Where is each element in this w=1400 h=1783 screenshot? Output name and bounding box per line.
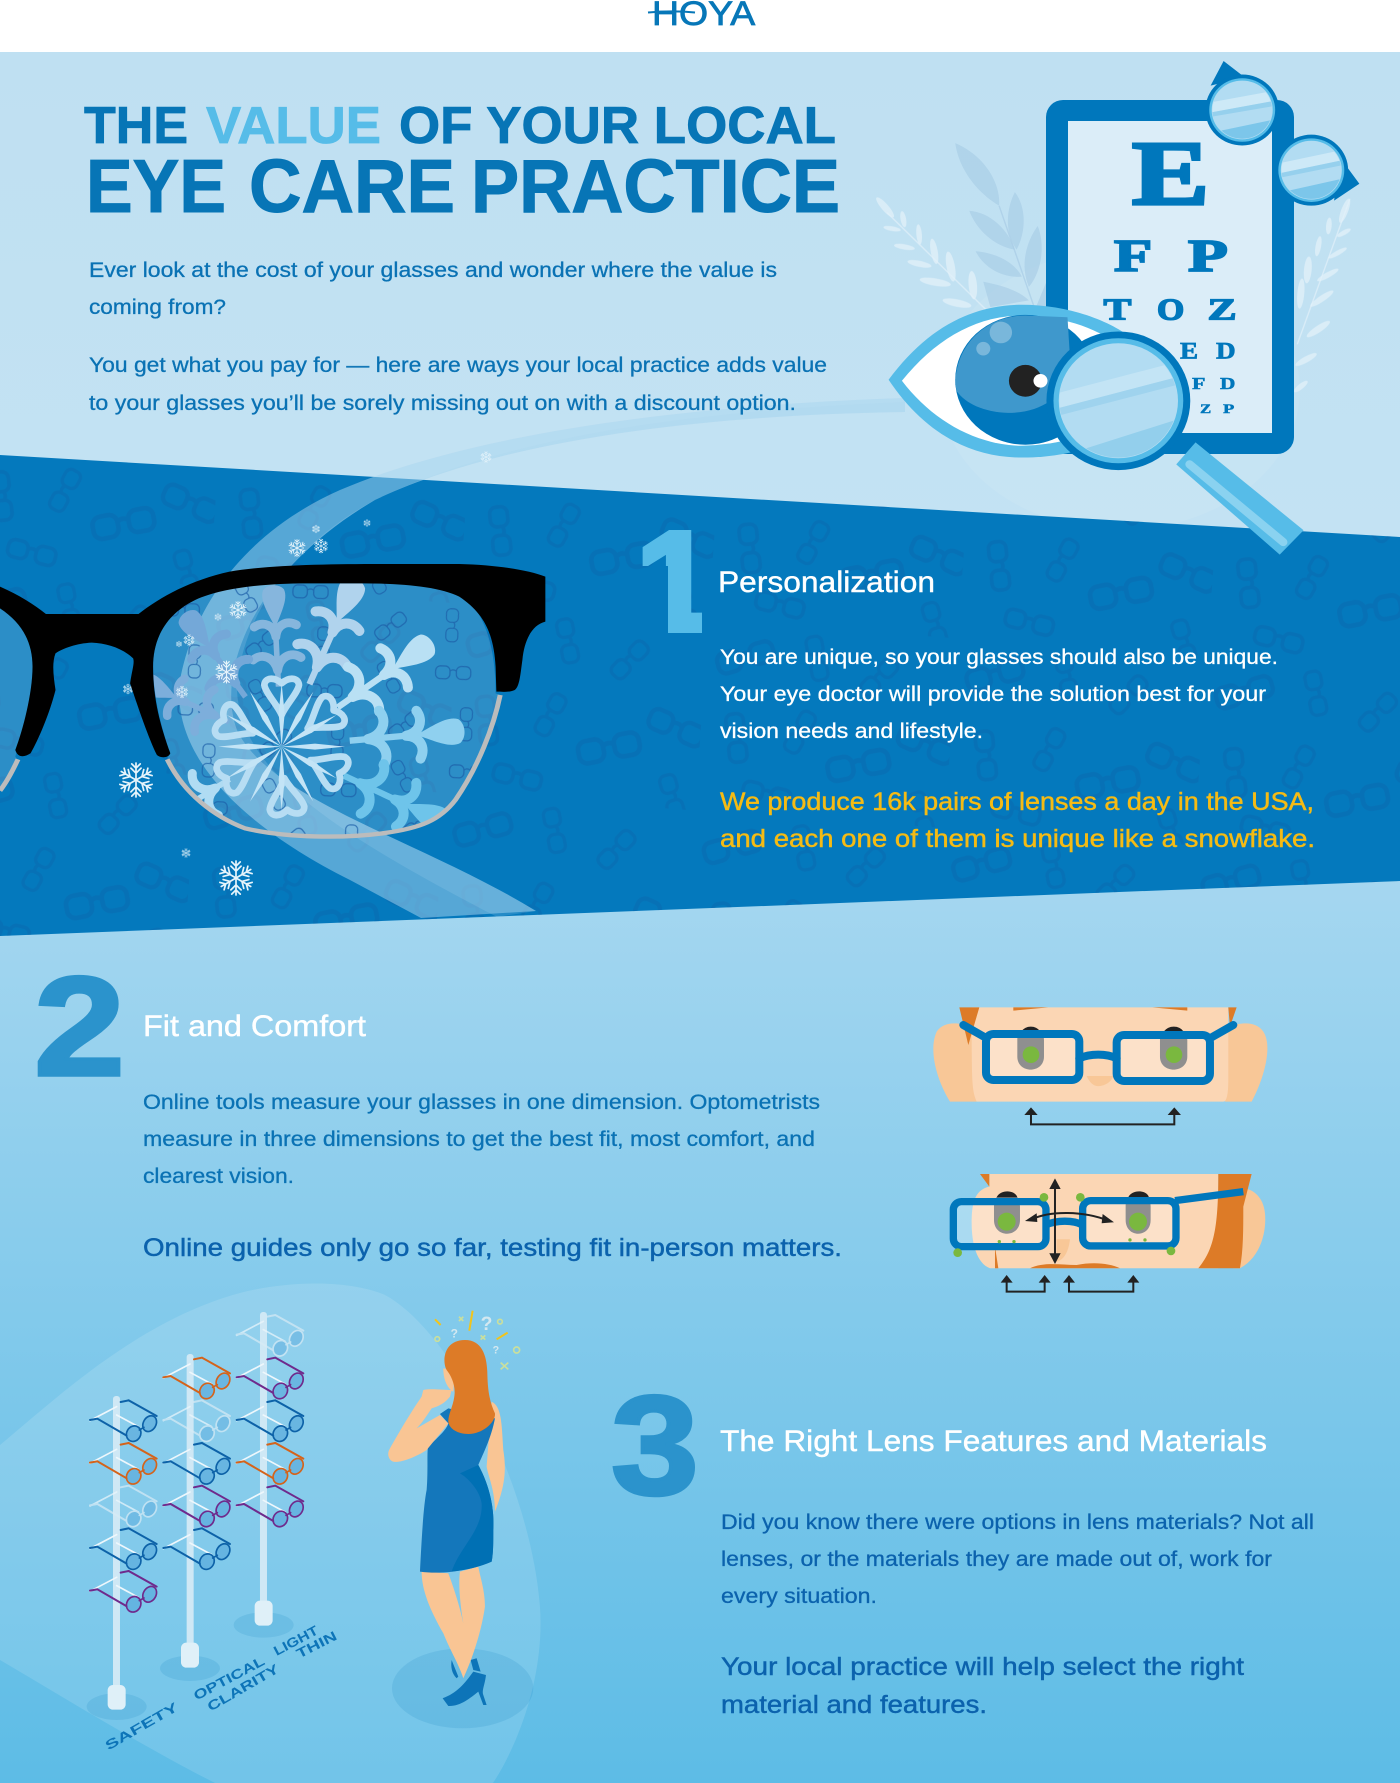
number 3: 3 (611, 1366, 699, 1524)
body text (721, 1510, 1314, 1608)
rack labels: LIGHT (271, 1623, 321, 1659)
highlight text: and each one of them is unique like a snowflake. (720, 825, 1315, 853)
highlight text (721, 1653, 1244, 1719)
rack labels: SAFETY (102, 1699, 181, 1753)
rack posts (113, 1312, 267, 1689)
body text: every situation. (721, 1584, 877, 1608)
number 1: 1 (636, 502, 714, 660)
confusion marks: ? (451, 1326, 458, 1340)
title: OF YOUR LOCAL (399, 97, 836, 155)
highlight text: Your local practice will help select the right (721, 1653, 1244, 1681)
left arm and hand (388, 1389, 452, 1462)
large snowflake (129, 568, 467, 855)
illustration: eye (889, 305, 1131, 458)
intro text: You get what you pay for — here are ways your local practice adds value (89, 353, 827, 377)
illustration: eye chart: Z (1200, 403, 1211, 416)
heading: personalization: Personalization (718, 566, 935, 599)
illustration: eye chart: F (1192, 374, 1206, 393)
front shoe (443, 1672, 487, 1706)
soft light circle around eye illustration (940, 250, 1300, 530)
rack shadows (87, 1612, 294, 1720)
rack labels: CLARITY (205, 1661, 282, 1714)
body text: Your eye doctor will provide the solution best for your (720, 682, 1266, 706)
body text: clearest vision. (143, 1164, 294, 1188)
background: top section (0, 52, 1400, 542)
right arm (487, 1402, 505, 1512)
rack bases (108, 1601, 273, 1710)
body text: measure in three dimensions to get the best fit, most comfort, and (143, 1127, 815, 1151)
intro text (89, 258, 827, 415)
intro text: coming from? (89, 295, 226, 319)
back shoe (451, 1658, 481, 1678)
section 1: personalization (636, 502, 1315, 853)
illustration: magnifying glass (1046, 331, 1304, 555)
illustration: eye chart: P (1188, 231, 1228, 282)
rack labels: OPTICAL (191, 1653, 267, 1703)
glasses on rack 1 (90, 1400, 159, 1615)
illustration: eye chart: F (1114, 230, 1152, 281)
illustration: face side view with measurement arrows (953, 1174, 1265, 1292)
confusion marks (435, 1311, 520, 1369)
illustration: black half-rim glasses (0, 564, 545, 837)
illustration: eyeglass display racks (87, 1312, 339, 1753)
body text: vision needs and lifestyle. (720, 719, 983, 743)
rack labels (102, 1623, 339, 1753)
face side (443, 1368, 455, 1392)
highlight text: We produce 16k pairs of lenses a day in the USA, (720, 788, 1314, 816)
body text (720, 645, 1278, 743)
illustration: snowflakes around glasses (119, 452, 492, 895)
light swoosh crescent (179, 398, 905, 918)
title: CARE (249, 144, 455, 228)
highlight text: Online guides only go so far, testing fit in-person matters. (143, 1234, 842, 1262)
dress (420, 1408, 495, 1573)
body text: Did you know there were options in lens materials? Not all (721, 1510, 1314, 1534)
illustration: lens with snowflake (153, 583, 500, 834)
hair (444, 1340, 495, 1434)
title: VALUE (206, 97, 381, 155)
panel: personalization band (0, 455, 1400, 936)
section 3: right lens features and materials (611, 1366, 1314, 1719)
body text: Online tools measure your glasses in one dimension. Optometrists (143, 1090, 820, 1114)
title: THE (84, 97, 188, 155)
heading: fit and comfort: Fit and Comfort (143, 1010, 367, 1043)
light blob behind racks and woman (0, 1283, 541, 1783)
glasses on rack 2 (163, 1358, 233, 1572)
intro text: to your glasses you’ll be sorely missing out on with a discount option. (89, 391, 796, 415)
illustration: eye chart: P (1223, 402, 1235, 416)
confusion marks: ? (481, 1314, 492, 1335)
white header (0, 0, 1400, 52)
legs (422, 1567, 485, 1678)
illustration: eye chart: E (1132, 124, 1209, 224)
intro text: Ever look at the cost of your glasses and wonder where the value is (89, 258, 777, 282)
title: EYE (86, 144, 226, 228)
title: PRACTICE (471, 144, 840, 228)
confusion marks: ? (493, 1344, 499, 1356)
illustration: eye chart (1046, 100, 1294, 454)
heading: lens features and materials: The Right Lens Features and Materials (720, 1425, 1267, 1458)
highlight text: material and features. (721, 1691, 987, 1719)
rack labels: THIN (294, 1628, 339, 1661)
floor shadow (392, 1648, 533, 1728)
illustration: face front view with glasses (933, 1007, 1267, 1124)
body text: lenses, or the materials they are made out of, work for (721, 1547, 1272, 1571)
section 2: fit and comfort (34, 948, 842, 1262)
body text: You are unique, so your glasses should also be unique. (720, 645, 1278, 669)
illustration: eye chart: E (1180, 339, 1198, 364)
illustration: woman choosing glasses (388, 1311, 533, 1728)
illustration: eye chart: Z (1208, 293, 1237, 327)
glasses on rack 3 (237, 1315, 306, 1529)
illustration: eye chart: D (1216, 339, 1236, 364)
illustration: eye chart: D (1220, 375, 1235, 393)
number 2: 2 (34, 948, 125, 1105)
illustration: eye chart: O (1157, 293, 1184, 327)
illustration: round glasses (1205, 61, 1359, 206)
illustration: leaves behind chart (874, 143, 1352, 394)
background: lower section (0, 870, 1400, 1783)
title (84, 97, 840, 228)
highlight text (720, 788, 1315, 853)
illustration: eye chart: T (1104, 292, 1131, 326)
body text (143, 1090, 820, 1188)
